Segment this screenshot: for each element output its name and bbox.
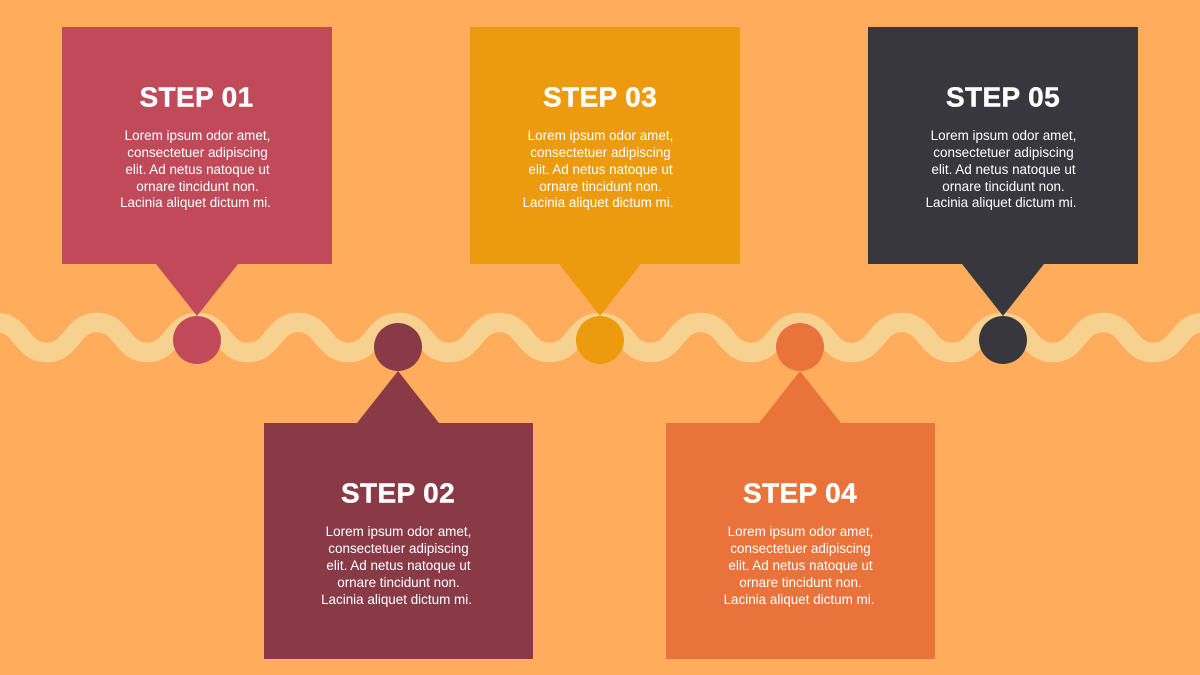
text block: step 04: Lacinia aliquet dictum mi. — [724, 592, 874, 607]
text block: step 03: Lorem ipsum odor amet, — [528, 128, 673, 143]
text block: step 03: consectetuer adipiscing — [530, 145, 671, 160]
panel: step 05 — [868, 27, 1138, 316]
text block: step 02: consectetuer adipiscing — [328, 541, 469, 556]
text block: step 02: Lacinia aliquet dictum mi. — [321, 592, 472, 607]
text block: step 05 — [926, 128, 1076, 210]
text block: step 01: consectetuer adipiscing — [127, 145, 268, 160]
heading: step 04: STEP 04 — [743, 478, 857, 508]
text block: step 01: ornare tincidunt non. — [136, 179, 259, 194]
text block: step 05: consectetuer adipiscing — [933, 145, 1074, 160]
timeline node 3 — [576, 316, 624, 364]
text block: step 05: ornare tincidunt non. — [942, 179, 1065, 194]
panel: step 04 — [666, 371, 935, 659]
text block: step 03 — [523, 128, 673, 210]
text block: step 02: Lorem ipsum odor amet, — [326, 524, 471, 539]
timeline node 4 — [776, 323, 824, 371]
panel: step 03 — [470, 27, 740, 316]
panel: step 01 — [62, 27, 332, 316]
heading: step 02: STEP 02 — [341, 478, 455, 508]
text block: step 05: elit. Ad netus natoque ut — [931, 162, 1076, 177]
heading: step 05: STEP 05 — [946, 82, 1060, 112]
heading: step 03: STEP 03 — [543, 82, 657, 112]
text block: step 05: Lorem ipsum odor amet, — [931, 128, 1076, 143]
text block: step 04 — [724, 524, 874, 607]
text block: step 04: ornare tincidunt non. — [739, 575, 862, 590]
text block: step 03: ornare tincidunt non. — [539, 179, 662, 194]
text block: step 02: ornare tincidunt non. — [337, 575, 460, 590]
text block: step 01: Lorem ipsum odor amet, — [125, 128, 270, 143]
text block: step 04: elit. Ad netus natoque ut — [728, 558, 873, 573]
timeline node 2 — [374, 323, 422, 371]
timeline node 5 — [979, 316, 1027, 364]
panel: step 02 — [264, 371, 533, 659]
text block: step 02 — [321, 524, 472, 607]
timeline node 1 — [173, 316, 221, 364]
text block: step 03: elit. Ad netus natoque ut — [528, 162, 673, 177]
text block: step 01: elit. Ad netus natoque ut — [125, 162, 270, 177]
text block: step 03: Lacinia aliquet dictum mi. — [523, 195, 673, 210]
text block: step 05: Lacinia aliquet dictum mi. — [926, 195, 1076, 210]
text block: step 04: Lorem ipsum odor amet, — [728, 524, 873, 539]
text block: step 01 — [120, 128, 271, 210]
text block: step 04: consectetuer adipiscing — [730, 541, 871, 556]
wavy timeline — [0, 322, 1200, 352]
text block: step 01: Lacinia aliquet dictum mi. — [120, 195, 271, 210]
text block: step 02: elit. Ad netus natoque ut — [326, 558, 471, 573]
heading: step 01: STEP 01 — [140, 82, 254, 112]
